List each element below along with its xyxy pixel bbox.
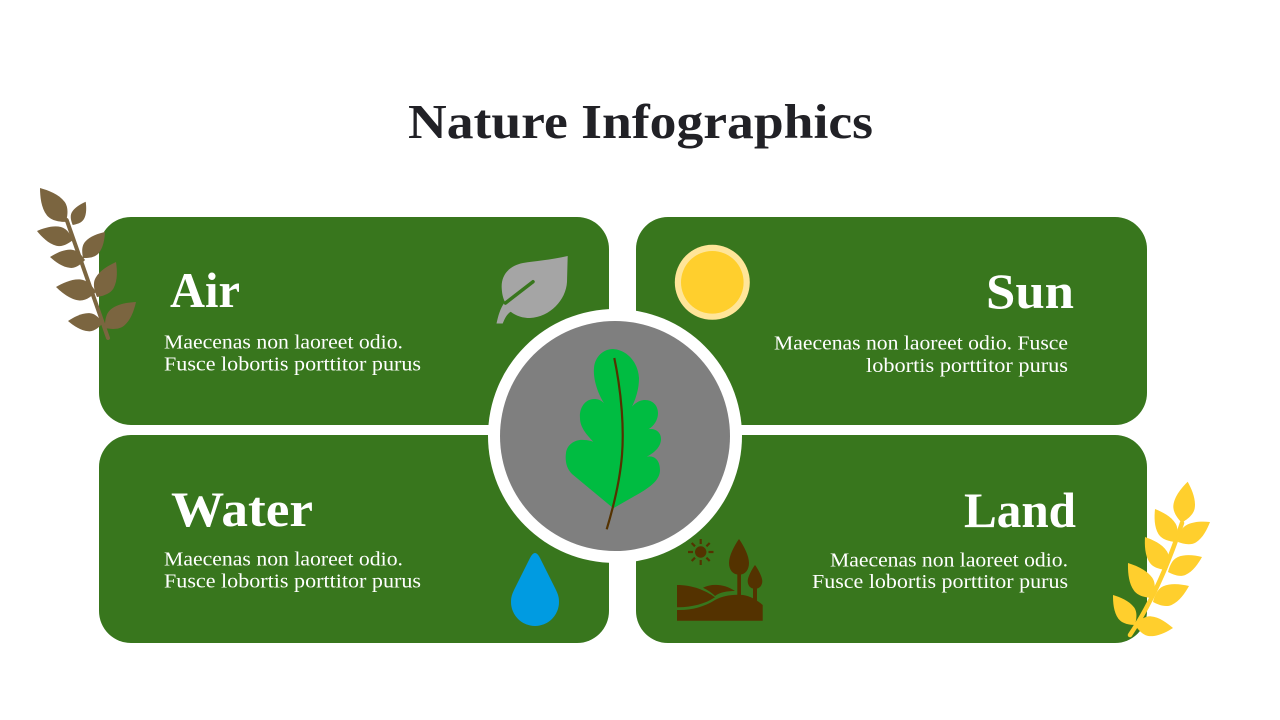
text block: air: Maecenas non laoreet odio. — [164, 332, 403, 354]
text block: land: Fusce lobortis porttitor purus — [812, 571, 1068, 593]
icon: center leaf — [566, 349, 661, 529]
text block: water: Maecenas non laoreet odio. — [164, 548, 403, 570]
heading: land: Land — [964, 482, 1076, 538]
text block: air: Fusce lobortis porttitor purus — [164, 354, 421, 376]
title: Nature Infographics — [408, 94, 873, 149]
heading: water: Water — [171, 481, 313, 537]
heading: sun: Sun — [986, 263, 1074, 319]
icon: yellow sprig — [1105, 480, 1215, 638]
icon: air leaf — [496, 256, 568, 324]
icon: land — [677, 539, 763, 621]
text block: sun: lobortis porttitor purus — [866, 355, 1068, 377]
text block: land — [812, 550, 1068, 593]
icon: water drop — [511, 553, 559, 626]
heading: air: Air — [170, 262, 240, 318]
text block: water: Fusce lobortis porttitor purus — [164, 570, 421, 592]
panel: water — [99, 435, 609, 643]
panel: sun — [636, 217, 1147, 425]
text block: air — [164, 332, 421, 376]
center circle — [488, 309, 742, 563]
text block: water — [164, 548, 421, 592]
text block: sun: Maecenas non laoreet odio. Fusce — [774, 332, 1068, 354]
panel: air — [99, 217, 609, 425]
panel: land — [636, 435, 1147, 643]
icon: sun — [675, 245, 750, 320]
text block: land: Maecenas non laoreet odio. — [830, 550, 1068, 572]
icon: brown sprig — [31, 181, 143, 338]
text block: sun — [774, 332, 1068, 377]
